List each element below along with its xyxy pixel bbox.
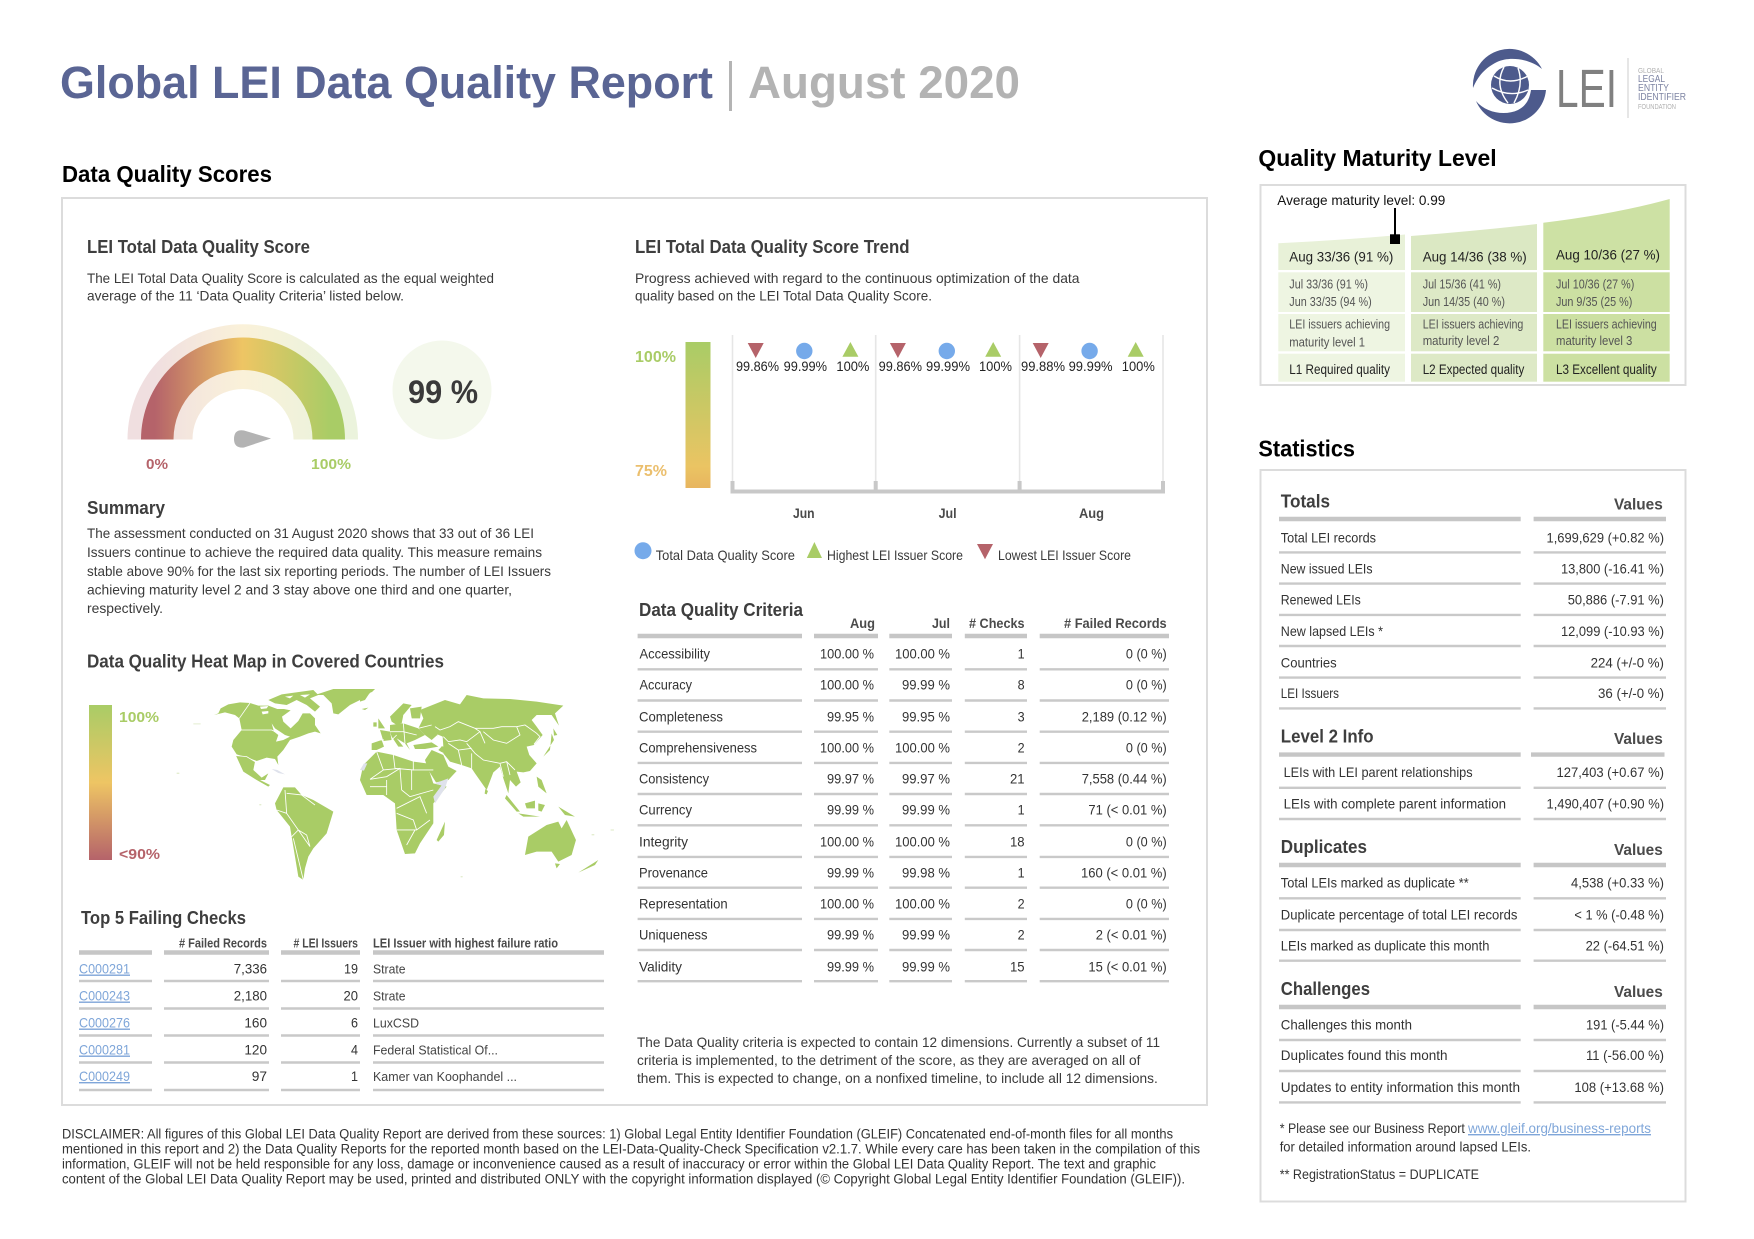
- table: data quality criteria: 99.95 %: [827, 708, 874, 724]
- table: challenges: 191 (-5.44 %): [1586, 1016, 1664, 1032]
- title: [60, 57, 1020, 111]
- text: summary: achieving maturity level 2 and 3 stay above one third and one quarter,: [87, 582, 512, 598]
- column: level 3: Jul 10/36 (27 %): [1556, 277, 1634, 291]
- text: summary: Issuers continue to achieve the required data quality. This measure remains: [87, 544, 542, 560]
- table: totals: 1,699,629 (+0.82 %): [1546, 530, 1664, 546]
- chart legend: Total Data Quality Score: [656, 547, 795, 563]
- table: top 5 failing checks: C000281: [79, 1042, 130, 1058]
- table: duplicates: Duplicates: [1281, 837, 1367, 857]
- logo: LEI: LEGAL: [1638, 73, 1665, 85]
- table: data quality criteria: Integrity: [639, 834, 688, 850]
- table: data quality criteria: 100.00 %: [820, 646, 874, 662]
- average maturity marker: Average maturity level: 0.99: [1277, 192, 1446, 208]
- text: trend description: [635, 270, 1080, 304]
- chart legend: Lowest LEI Issuer Score: [998, 547, 1131, 563]
- table: challenges: 11 (-56.00 %): [1586, 1047, 1664, 1063]
- text: score description: [87, 270, 494, 304]
- table: top 5 failing checks: C000243: [79, 988, 130, 1004]
- score badge: 99 %: 99 %: [408, 374, 478, 410]
- table: totals: Renewed LEIs: [1281, 592, 1361, 608]
- table: data quality criteria: 100.00 %: [820, 834, 874, 850]
- table: data quality criteria: 100.00 %: [895, 896, 950, 912]
- table: data quality criteria: 99.99 %: [902, 802, 950, 818]
- table: totals: New lapsed LEIs *: [1281, 623, 1383, 639]
- marker values: 99.99%: [926, 358, 970, 374]
- table: top 5 failing checks: 120: [244, 1042, 267, 1058]
- table: data quality criteria: Uniqueness: [639, 926, 708, 942]
- table: challenges: [1279, 979, 1666, 1102]
- table: data quality criteria: 100.00 %: [895, 740, 950, 756]
- text: disclaimer: information, GLEIF will not be held responsible for any loss, damage or inconvenience caused as a result of inaccuracy or error within the Global LEI Data Quality Report. The text and graphic: [62, 1156, 1156, 1172]
- gauge chart: 100%: [311, 456, 351, 473]
- table: top 5 failing checks: 1: [351, 1068, 358, 1084]
- table: data quality criteria: 100.00 %: [895, 834, 950, 850]
- table: top 5 failing checks: 160: [244, 1014, 267, 1030]
- table: totals: Total LEI records: [1281, 530, 1376, 546]
- marker values: 100%: [836, 358, 869, 374]
- table: data quality criteria: 99.97 %: [902, 770, 950, 786]
- table: top 5 failing checks: Strate: [373, 962, 406, 976]
- marker values: 100%: [1122, 358, 1155, 374]
- heading: score trend: LEI Total Data Quality Score Trend: [635, 237, 910, 257]
- table: top 5 failing checks: 4: [351, 1042, 358, 1058]
- table: data quality criteria: 3: [1018, 708, 1025, 724]
- trend chart: [635, 335, 1163, 521]
- text: disclaimer: DISCLAIMER: All figures of this Global LEI Data Quality Report are derived from these sources: 1) Global Legal Entity Identifier Foundation (GLEIF) Concatenated end-of-month files for all months: [62, 1126, 1173, 1142]
- text: trend description: Progress achieved with regard to the continuous optimization of the data: [635, 270, 1080, 286]
- table: data quality criteria: 100.00 %: [820, 896, 874, 912]
- table: top 5 failing checks: C000249: [79, 1068, 130, 1084]
- footnotes: ** RegistrationStatus = DUPLICATE: [1280, 1166, 1479, 1182]
- logo: LEI: FOUNDATION: [1638, 104, 1676, 111]
- table: level 2 info: Values: [1614, 731, 1663, 748]
- column: level 2: Jun 14/35 (40 %): [1423, 295, 1505, 309]
- table: data quality criteria: 0 (0 %): [1126, 896, 1167, 912]
- heat map legend: <90%: [119, 846, 160, 863]
- table: data quality criteria: Accuracy: [640, 676, 692, 692]
- logo: LEI: ENTITY: [1638, 82, 1669, 94]
- table: data quality criteria: 2,189 (0.12 %): [1082, 708, 1167, 724]
- table: data quality criteria: 99.97 %: [827, 770, 874, 786]
- table: top 5 failing checks: LuxCSD: [373, 1016, 419, 1030]
- table: challenges: Values: [1614, 984, 1663, 1001]
- table: duplicates: Values: [1614, 842, 1663, 859]
- column: level 1: Jul 33/36 (91 %): [1289, 277, 1368, 291]
- month labels: Jun: [793, 505, 815, 521]
- table: totals: Values: [1614, 496, 1663, 513]
- column: level 3: LEI issuers achieving: [1556, 317, 1657, 331]
- table: data quality criteria: 99.99 %: [902, 958, 950, 974]
- table: level 2 info: LEIs with LEI parent relationships: [1284, 764, 1473, 780]
- marker values: 99.99%: [784, 358, 827, 374]
- table: data quality criteria: 99.99 %: [902, 676, 950, 692]
- table: top 5 failing checks: [79, 936, 604, 1090]
- marker values: 99.88%: [1021, 358, 1065, 374]
- table: totals: 12,099 (-10.93 %): [1561, 623, 1664, 639]
- text: score description: average of the 11 ‘Data Quality Criteria’ listed below.: [87, 288, 404, 304]
- table: challenges: Duplicates found this month: [1281, 1047, 1448, 1063]
- footnotes: for detailed information around lapsed LEIs.: [1280, 1138, 1531, 1154]
- heading: LEI Total Data Quality Score: LEI Total Data Quality Score: [87, 237, 310, 257]
- text: criteria note: criteria is implemented, to the detriment of the score, as they are averaged on all of: [637, 1052, 1140, 1068]
- table: data quality criteria: # Checks: [969, 616, 1025, 631]
- title: August 2020: [748, 57, 1020, 108]
- colour scale bar: 100%: [635, 349, 676, 366]
- table: totals: 50,886 (-7.91 %): [1568, 592, 1664, 608]
- table: totals: Totals: [1281, 491, 1330, 511]
- table: totals: 13,800 (-16.41 %): [1561, 560, 1664, 576]
- column: level 2: [1411, 224, 1537, 382]
- column: level 3: L3 Excellent quality: [1556, 362, 1657, 377]
- table: data quality criteria: 21: [1010, 770, 1025, 786]
- marker values: 99.99%: [1069, 358, 1113, 374]
- chart legend: Highest LEI Issuer Score: [827, 547, 963, 563]
- table: data quality criteria: 2: [1018, 926, 1025, 942]
- table: top 5 failing checks: C000291: [79, 960, 130, 976]
- table: data quality criteria: 1: [1018, 864, 1025, 880]
- logo: LEI: IDENTIFIER: [1638, 91, 1686, 103]
- table: challenges: Challenges: [1281, 979, 1370, 999]
- table: top 5 failing checks: C000276: [79, 1014, 130, 1030]
- footnotes: www.gleif.org/business-reports: [1467, 1120, 1651, 1136]
- table: totals: LEI Issuers: [1281, 685, 1339, 701]
- column: level 1: Aug 33/36 (91 %): [1289, 249, 1393, 265]
- heading: Summary: Summary: [87, 498, 165, 518]
- column: level 2: Jul 15/36 (41 %): [1423, 277, 1501, 291]
- table: data quality criteria: 100.00 %: [820, 676, 874, 692]
- column: level 3: maturity level 3: [1556, 334, 1632, 348]
- table: duplicates: Total LEIs marked as duplicate **: [1281, 874, 1469, 890]
- table: data quality criteria: Comprehensiveness: [639, 740, 757, 756]
- heat map legend: [89, 705, 160, 863]
- footnotes: [1280, 1120, 1651, 1182]
- logo: LEI: LEI: [1556, 59, 1617, 119]
- table: totals: 224 (+/-0 %): [1591, 654, 1664, 670]
- column: level 1: maturity level 1: [1289, 336, 1365, 350]
- text: summary: The assessment conducted on 31 August 2020 shows that 33 out of 36 LEI: [87, 525, 534, 541]
- heading: Top 5 Failing Checks: Top 5 Failing Checks: [81, 908, 246, 928]
- table: data quality criteria: 0 (0 %): [1126, 676, 1167, 692]
- column: level 3: Aug 10/36 (27 %): [1556, 246, 1660, 262]
- column: level 2: maturity level 2: [1423, 334, 1499, 348]
- table: data quality criteria: 0 (0 %): [1126, 834, 1167, 850]
- table: data quality criteria: 99.99 %: [827, 864, 874, 880]
- table: data quality criteria: 18: [1010, 834, 1025, 850]
- text: disclaimer: mentioned in this report and 2) the Data Quality Reports for the reported month based on the LEI-Data-Quality-Check Specification v2.1.7. While every care has been taken in the compilation of this: [62, 1142, 1200, 1156]
- column: level 1: LEI issuers achieving: [1289, 317, 1390, 331]
- table: totals: Countries: [1281, 654, 1337, 670]
- table: data quality criteria: Representation: [639, 896, 728, 912]
- table: data quality criteria: 2 (< 0.01 %): [1096, 926, 1167, 942]
- table: data quality criteria: 99.99 %: [827, 802, 874, 818]
- table: top 5 failing checks: # LEI Issuers: [294, 936, 358, 950]
- table: top 5 failing checks: # Failed Records: [179, 936, 267, 950]
- table: data quality criteria: Completeness: [639, 708, 723, 724]
- table: level 2 info: 127,403 (+0.67 %): [1556, 764, 1664, 780]
- text: criteria note: [637, 1034, 1160, 1086]
- table: level 2 info: LEIs with complete parent information: [1284, 795, 1506, 811]
- table: totals: [1279, 491, 1666, 708]
- table: totals: 36 (+/-0 %): [1598, 685, 1664, 701]
- table: top 5 failing checks: 19: [344, 960, 358, 976]
- panel: statistics: [1260, 470, 1686, 1202]
- table: totals: New issued LEIs: [1281, 560, 1372, 576]
- table: data quality criteria: 99.95 %: [902, 708, 950, 724]
- heat map legend: 100%: [119, 709, 159, 726]
- markers: highest issuer score: [842, 342, 1144, 357]
- heading: Data Quality Scores: Data Quality Scores: [62, 161, 272, 187]
- text: trend description: quality based on the LEI Total Data Quality Score.: [635, 288, 932, 304]
- table: level 2 info: Level 2 Info: [1281, 726, 1374, 746]
- table: data quality criteria: [638, 616, 1169, 981]
- marker values: 100%: [979, 358, 1012, 374]
- text: criteria note: The Data Quality criteria is expected to contain 12 dimensions. Currently a subset of 11: [637, 1034, 1160, 1050]
- table: data quality criteria: 100.00 %: [895, 646, 950, 662]
- table: data quality criteria: 71 (< 0.01 %): [1088, 802, 1167, 818]
- table: top 5 failing checks: 97: [252, 1068, 267, 1084]
- month labels: [793, 505, 1104, 521]
- table: data quality criteria: 99.99 %: [827, 958, 874, 974]
- heading: Data Quality Criteria: Data Quality Criteria: [639, 600, 804, 620]
- table: top 5 failing checks: Kamer van Koophandel ...: [373, 1069, 517, 1084]
- panel: quality maturity level: [1260, 185, 1686, 385]
- markers: total score: [796, 343, 1098, 359]
- month labels: Jul: [939, 505, 957, 521]
- table: data quality criteria: 2: [1018, 896, 1025, 912]
- table: data quality criteria: Aug: [850, 616, 875, 631]
- marker values: 99.86%: [736, 358, 779, 374]
- table: data quality criteria: 7,558 (0.44 %): [1082, 770, 1167, 786]
- column: level 3: Jun 9/35 (25 %): [1556, 295, 1632, 309]
- table: data quality criteria: 0 (0 %): [1126, 740, 1167, 756]
- logo: LEI: GLOBAL: [1638, 68, 1664, 75]
- month labels: Aug: [1079, 505, 1104, 521]
- text: disclaimer: content of the Global LEI Data Quality Report may be used, printed and distributed ONLY with the copyright information displayed (© Copyright Global Legal Entity Identifier Foundation (GLEIF)).: [62, 1172, 1185, 1186]
- table: top 5 failing checks: 2,180: [234, 988, 267, 1004]
- table: data quality criteria: 100.00 %: [820, 740, 874, 756]
- heading: heat map: Data Quality Heat Map in Covered Countries: [87, 652, 444, 672]
- table: data quality criteria: 1: [1018, 802, 1025, 818]
- table: data quality criteria: 99.99 %: [827, 926, 874, 942]
- table: duplicates: LEIs marked as duplicate this month: [1281, 937, 1489, 953]
- table: data quality criteria: 99.99 %: [902, 926, 950, 942]
- table: challenges: Updates to entity information this month: [1281, 1079, 1520, 1095]
- average maturity marker: [1277, 192, 1446, 244]
- table: duplicates: < 1 % (-0.48 %): [1574, 906, 1664, 922]
- table: duplicates: [1279, 837, 1666, 961]
- table: data quality criteria: 99.98 %: [902, 864, 950, 880]
- table: level 2 info: 1,490,407 (+0.90 %): [1546, 795, 1664, 811]
- marker values: 99.86%: [879, 358, 922, 374]
- table: top 5 failing checks: Strate: [373, 988, 406, 1004]
- gauge chart: [128, 324, 358, 473]
- world map: [177, 689, 614, 880]
- table: challenges: 108 (+13.68 %): [1574, 1079, 1664, 1095]
- table: duplicates: 4,538 (+0.33 %): [1571, 874, 1664, 890]
- text: summary: [87, 525, 551, 616]
- table: data quality criteria: 2: [1018, 740, 1025, 756]
- table: challenges: Challenges this month: [1281, 1016, 1412, 1032]
- table: data quality criteria: Consistency: [639, 770, 709, 786]
- column: level 3: [1543, 199, 1670, 382]
- column: level 1: [1278, 234, 1405, 382]
- column: level 1: L1 Required quality: [1289, 362, 1390, 377]
- table: top 5 failing checks: 20: [344, 988, 358, 1004]
- table: level 2 info: [1279, 726, 1666, 819]
- score badge: 99 %: [392, 340, 492, 440]
- table: data quality criteria: # Failed Records: [1064, 616, 1167, 631]
- footnotes: * Please see our Business Report: [1280, 1120, 1465, 1136]
- table: data quality criteria: 1: [1018, 646, 1025, 662]
- table: duplicates: 22 (-64.51 %): [1586, 937, 1664, 953]
- colour scale bar: 75%: [635, 463, 667, 480]
- markers: lowest issuer score: [748, 343, 1049, 358]
- column: level 1: Jun 33/35 (94 %): [1289, 295, 1372, 309]
- table: data quality criteria: Accessibility: [640, 646, 710, 662]
- table: data quality criteria: 15: [1010, 958, 1025, 974]
- title: Global LEI Data Quality Report: [60, 57, 713, 108]
- text: summary: stable above 90% for the last six reporting periods. The number of LEI Issuers: [87, 563, 551, 579]
- text: score description: The LEI Total Data Quality Score is calculated as the equal weighted: [87, 270, 494, 286]
- text: disclaimer: [62, 1126, 1200, 1186]
- text: summary: respectively.: [87, 600, 163, 616]
- column: level 2: L2 Expected quality: [1423, 362, 1525, 377]
- table: top 5 failing checks: 7,336: [234, 960, 267, 976]
- chart legend: [634, 542, 1131, 563]
- table: data quality criteria: Provenance: [639, 864, 708, 880]
- table: duplicates: Duplicate percentage of total LEI records: [1281, 906, 1517, 922]
- heading: Quality Maturity Level: Quality Maturity Level: [1258, 145, 1497, 171]
- table: top 5 failing checks: LEI Issuer with highest failure ratio: [373, 936, 558, 950]
- table: data quality criteria: 0 (0 %): [1126, 646, 1167, 662]
- gauge chart: 0%: [146, 456, 168, 473]
- table: data quality criteria: 8: [1018, 676, 1025, 692]
- text: criteria note: them. This is expected to change, on a nonfixed timeline, to include all 12 dimensions.: [637, 1070, 1158, 1086]
- panel: data quality scores: [62, 198, 1207, 1105]
- table: data quality criteria: 15 (< 0.01 %): [1088, 958, 1167, 974]
- table: top 5 failing checks: 6: [351, 1014, 358, 1030]
- marker values: [736, 358, 1155, 374]
- logo: LEI: [1473, 49, 1686, 123]
- table: data quality criteria: Validity: [639, 958, 682, 974]
- table: top 5 failing checks: Federal Statistical Of...: [373, 1042, 498, 1058]
- heading: Statistics: Statistics: [1258, 436, 1355, 462]
- table: data quality criteria: Currency: [639, 802, 692, 818]
- column: level 2: LEI issuers achieving: [1423, 317, 1523, 331]
- table: data quality criteria: Jul: [932, 616, 950, 631]
- column: level 2: Aug 14/36 (38 %): [1423, 249, 1527, 265]
- table: data quality criteria: 160 (< 0.01 %): [1081, 864, 1167, 880]
- colour scale bar: [635, 342, 710, 488]
